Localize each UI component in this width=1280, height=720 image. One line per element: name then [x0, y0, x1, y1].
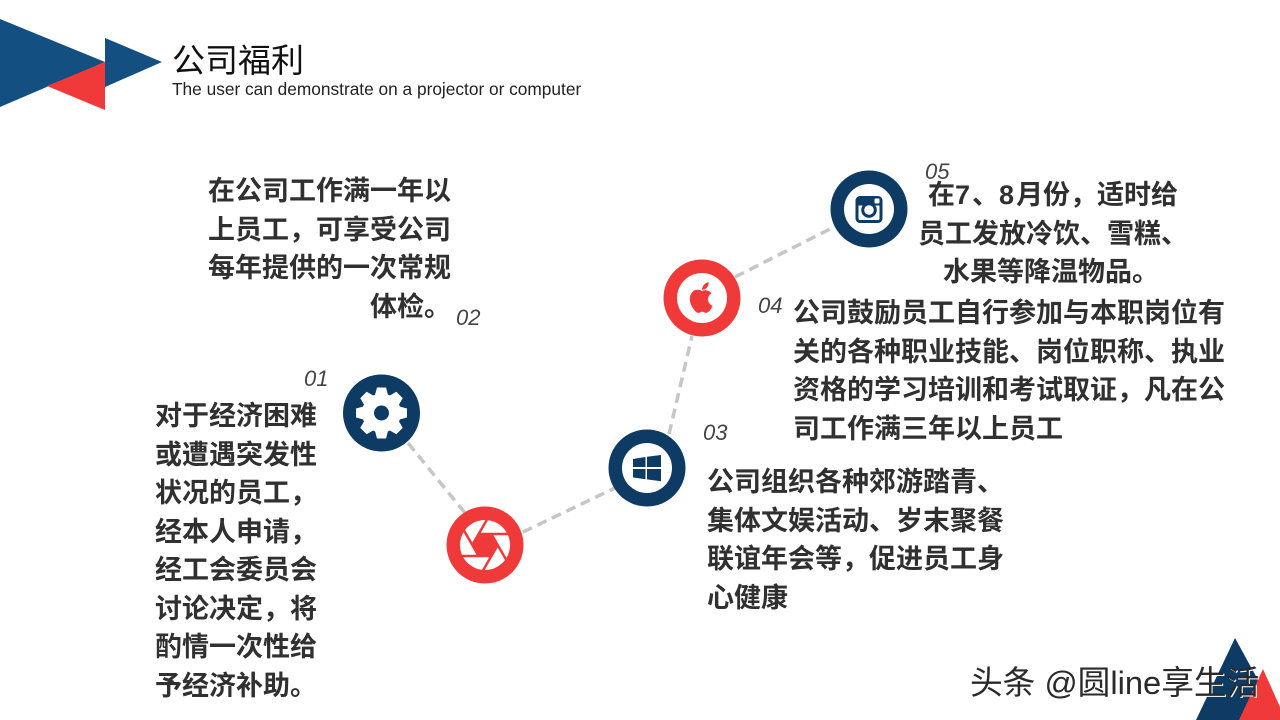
- item 02 text: 每年提供的一次常规: [208, 253, 451, 283]
- item 04 text: 司工作满三年以上员工: [793, 414, 1063, 444]
- item 03 text: 联谊年会等，促进员工身: [707, 544, 1004, 574]
- item 04 text: [793, 298, 1225, 444]
- item 05 number: 05: [925, 159, 949, 184]
- item 04 text: 公司鼓励员工自行参加与本职岗位有: [793, 298, 1225, 328]
- item 02 text: [208, 176, 451, 322]
- item 01 text: 经工会委员会: [155, 555, 317, 585]
- item 03 text: 集体文娱活动、岁末聚餐: [707, 506, 1004, 536]
- item 01 text: 酌情一次性给: [155, 632, 317, 662]
- item 02 text: 在公司工作满一年以: [208, 176, 451, 206]
- item 02 text: 上员工，可享受公司: [208, 214, 451, 244]
- item 02 number: 02: [456, 305, 480, 330]
- watermark: 头条 @圆line享生活: [970, 664, 1259, 701]
- item 03 text: 心健康: [707, 582, 788, 612]
- item 01 text: 或遭遇突发性: [155, 440, 317, 470]
- item 01 text: 对于经济困难: [155, 401, 317, 431]
- title: 公司福利: [172, 42, 304, 79]
- item 01 text: 经本人申请，: [155, 516, 317, 546]
- subtitle: The user can demonstrate on a projector or computer: [172, 79, 581, 99]
- item 05 text: 水果等降温物品。: [943, 257, 1159, 287]
- item 03 text: 公司组织各种郊游踏青、: [707, 467, 1004, 497]
- item 03 number: 03: [703, 420, 727, 445]
- item 05 text: 员工发放冷饮、雪糕、: [918, 218, 1188, 248]
- item 01 text: 予经济补助。: [155, 670, 317, 700]
- item 02 text: 体检。: [370, 292, 451, 322]
- item 01 number: 01: [304, 366, 328, 391]
- item 04 text: 关的各种职业技能、岗位职称、执业: [793, 336, 1225, 366]
- item 05 text: [918, 180, 1188, 287]
- item 01 text: 状况的员工，: [155, 478, 317, 508]
- item 05 text: 在7、8月份，适时给: [928, 180, 1178, 210]
- item 01 text: 讨论决定，将: [155, 594, 317, 624]
- item 04 number: 04: [758, 293, 782, 318]
- item 03 text: [707, 467, 1004, 612]
- item 01 text: [155, 401, 317, 700]
- header triangles decoration: [0, 19, 162, 110]
- item 04 text: 资格的学习培训和考试取证，凡在公: [793, 375, 1225, 405]
